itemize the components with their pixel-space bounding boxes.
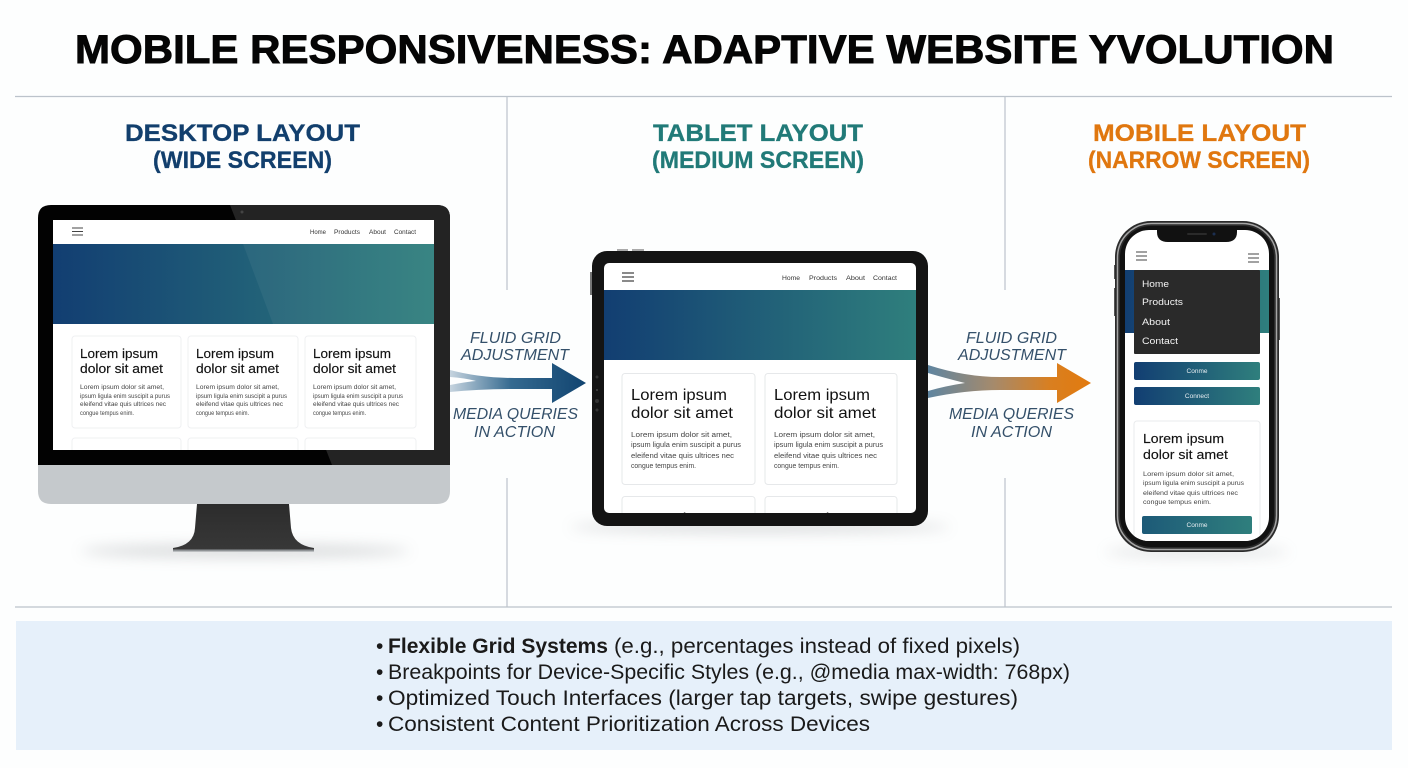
heading: tablet layout: (MEDIUM SCREEN) xyxy=(652,147,864,174)
card: Lorem ipsum xyxy=(1143,431,1224,446)
label: media queries left: MEDIA QUERIES xyxy=(453,406,578,423)
card 3: ipsum ligula enim suscipit a purus xyxy=(313,394,403,400)
heading: mobile layout xyxy=(1088,120,1310,174)
bullet list: (e.g., percentages instead of fixed pixels) xyxy=(614,635,1020,658)
card 2: eleifend vitae quis ultrices nec xyxy=(774,453,878,460)
label: media queries left: IN ACTION xyxy=(474,424,555,441)
card xyxy=(1134,421,1260,551)
label: media queries right: MEDIA QUERIES xyxy=(949,406,1074,423)
card 2: congue tempus enim. xyxy=(196,411,249,417)
arrow: desktop to tablet xyxy=(450,363,586,403)
card 1 xyxy=(72,336,181,428)
tablet: Home xyxy=(782,276,801,282)
card 1 xyxy=(622,374,755,484)
desktop monitor xyxy=(38,205,450,557)
card 2: ipsum ligula enim suscipit a purus xyxy=(196,394,287,400)
panel: key techniques xyxy=(16,621,1392,750)
bullet list: Breakpoints for Device-Specific Styles (e.g., @media max-width: 768px) xyxy=(388,661,1070,684)
heading: desktop layout: DESKTOP LAYOUT xyxy=(125,120,360,147)
card 2 xyxy=(765,374,897,484)
heading: tablet layout xyxy=(652,120,864,174)
label: fluid grid adjustment left: ADJUSTMENT xyxy=(460,347,570,364)
tablet: Contact xyxy=(873,276,897,282)
heading: mobile layout: (NARROW SCREEN) xyxy=(1088,147,1310,174)
tablet: Lorem ipsum xyxy=(774,511,870,528)
desktop monitor: Contact xyxy=(394,230,416,236)
card 1: Lorem ipsum dolor sit amet, xyxy=(631,432,732,439)
button: connect: Connect xyxy=(1185,393,1209,400)
dropdown menu xyxy=(1142,279,1184,346)
card 2: congue tempus enim. xyxy=(774,463,839,470)
card 2: Lorem ipsum xyxy=(196,346,274,361)
card 2: dolor sit amet xyxy=(774,405,877,422)
card 1: congue tempus enim. xyxy=(631,463,696,470)
label: media queries right xyxy=(949,406,1074,441)
card: congue tempus enim. xyxy=(1143,500,1211,506)
card 1: dolor sit amet xyxy=(80,361,163,376)
card 1: congue tempus enim. xyxy=(80,411,134,417)
label: media queries right: IN ACTION xyxy=(971,424,1052,441)
button: conme: Conme xyxy=(1187,368,1208,375)
dropdown menu: About xyxy=(1142,317,1171,327)
card 2: eleifend vitae quis ultrices nec xyxy=(196,402,283,408)
card 3 xyxy=(305,336,416,428)
dropdown menu: Contact xyxy=(1142,336,1179,346)
label: fluid grid adjustment left xyxy=(460,330,570,364)
bullet list: Optimized Touch Interfaces (larger tap targets, swipe gestures) xyxy=(388,687,1018,710)
card: Lorem ipsum dolor sit amet, xyxy=(1143,472,1234,478)
card: eleifend vitae quis ultrices nec xyxy=(1143,491,1238,497)
label: media queries left xyxy=(453,406,578,441)
tablet: Lorem ipsum xyxy=(631,511,727,528)
bullet list: Flexible Grid Systems xyxy=(388,635,608,658)
heading: tablet layout: TABLET LAYOUT xyxy=(653,120,863,147)
card 3: dolor sit amet xyxy=(313,361,396,376)
card 1: eleifend vitae quis ultrices nec xyxy=(631,453,735,460)
card 1: Lorem ipsum dolor sit amet, xyxy=(80,385,164,391)
card 2: dolor sit amet xyxy=(196,361,279,376)
tablet: About xyxy=(846,276,865,282)
card 3: Lorem ipsum xyxy=(313,346,391,361)
card 3: congue tempus enim. xyxy=(313,411,366,417)
label: fluid grid adjustment left: FLUID GRID xyxy=(470,330,561,347)
card 1: dolor sit amet xyxy=(631,405,734,422)
card 1: eleifend vitae quis ultrices nec xyxy=(80,402,166,408)
card 3: Lorem ipsum dolor sit amet, xyxy=(313,385,396,391)
tablet: Products xyxy=(809,276,837,282)
button: conme xyxy=(1134,362,1260,380)
smartphone xyxy=(1105,221,1289,556)
button: connect xyxy=(1134,387,1260,405)
title: MOBILE RESPONSIVENESS: ADAPTIVE WEBSITE YVOLUTION xyxy=(75,28,1334,72)
card: Conme xyxy=(1187,522,1208,529)
heading: desktop layout xyxy=(125,120,360,174)
heading: mobile layout: MOBILE LAYOUT xyxy=(1093,120,1306,147)
card 2: Lorem ipsum dolor sit amet, xyxy=(196,385,279,391)
card 2 xyxy=(188,336,298,428)
card: ipsum ligula enim suscipit a purus xyxy=(1143,481,1244,487)
bullet list: • xyxy=(376,713,383,736)
card 2: Lorem ipsum xyxy=(774,387,870,404)
card 3: eleifend vitae quis ultrices nec xyxy=(313,402,399,408)
card 2: ipsum ligula enim suscipit a purus xyxy=(774,442,884,449)
label: fluid grid adjustment right xyxy=(957,330,1067,364)
desktop monitor: Home xyxy=(310,230,327,236)
arrow: tablet to mobile xyxy=(928,363,1091,403)
card 2: Lorem ipsum dolor sit amet, xyxy=(774,432,875,439)
dropdown menu: Products xyxy=(1142,297,1184,307)
bullet list xyxy=(376,635,1070,736)
bullet list: • xyxy=(376,661,383,684)
desktop monitor: Products xyxy=(334,230,360,236)
bullet list: • xyxy=(376,687,383,710)
card: dolor sit amet xyxy=(1143,447,1228,462)
card 1: ipsum ligula enim suscipit a purus xyxy=(631,442,742,449)
heading: desktop layout: (WIDE SCREEN) xyxy=(153,147,332,174)
label: fluid grid adjustment right: FLUID GRID xyxy=(966,330,1057,347)
desktop monitor: About xyxy=(369,230,386,236)
tablet xyxy=(570,249,950,536)
card 1: ipsum ligula enim suscipit a purus xyxy=(80,394,170,400)
bullet list: • xyxy=(376,635,383,658)
card 1: Lorem ipsum xyxy=(631,387,727,404)
bullet list: Consistent Content Prioritization Across Devices xyxy=(388,713,870,736)
card 1: Lorem ipsum xyxy=(80,346,158,361)
label: fluid grid adjustment right: ADJUSTMENT xyxy=(957,347,1067,364)
dropdown menu: Home xyxy=(1142,279,1169,289)
